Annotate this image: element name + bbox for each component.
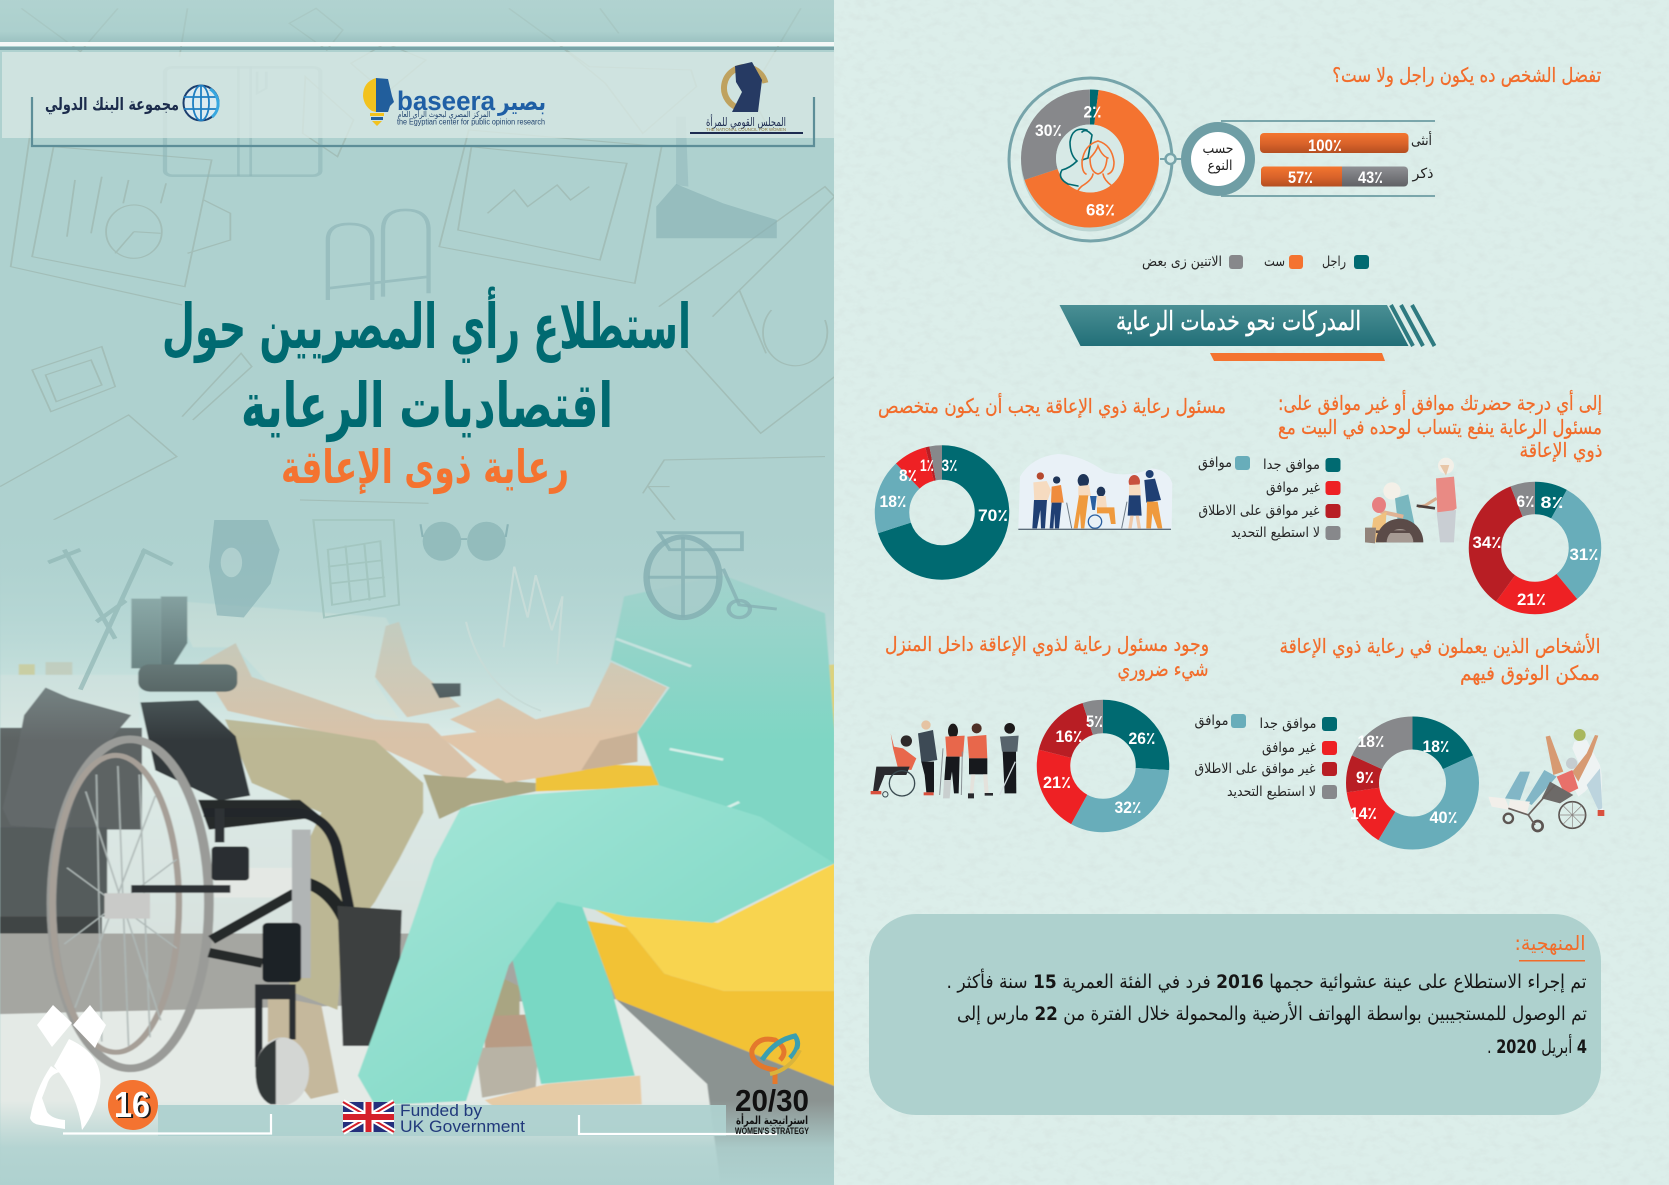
background: sketch line art	[0, 8, 835, 520]
logo: Women's Strategy 2030: استراتيجية المرأة	[736, 1113, 808, 1127]
panel: caregiver must be specialised	[878, 393, 1226, 562]
donut labels: 18٪	[880, 492, 906, 511]
donut labels: 31٪	[1570, 545, 1598, 564]
logo: Women's Strategy 2030	[735, 1036, 809, 1136]
donut shadow	[1021, 94, 1159, 232]
question heading: مسئول رعاية ذوي الإعاقة يجب أن يكون متخصص	[878, 393, 1226, 419]
patient's shirt and arms	[187, 602, 388, 690]
legend: راجل	[1322, 254, 1346, 270]
donut labels: 18٪	[1422, 737, 1450, 756]
photo fades	[0, 575, 834, 728]
question heading: إلى أي درجة حضرتك موافق أو غير موافق على:	[1278, 390, 1602, 416]
panel: home caregiver is necessary	[871, 632, 1209, 817]
question heading: ذوي الإعاقة	[1520, 438, 1602, 463]
donut labels: 8٪	[899, 466, 917, 485]
methodology text	[946, 968, 1587, 1058]
issue number badge: 16	[116, 1085, 152, 1126]
donut labels	[1350, 732, 1458, 827]
legend: لا استطيع التحديد	[1227, 784, 1316, 800]
legend: غير موافق	[1262, 740, 1316, 756]
patient's trousers	[423, 774, 536, 819]
logo: Baseera: the Egyptian center for public opinion research	[397, 118, 545, 126]
question heading: ممكن الوثوق فيهم	[1460, 661, 1600, 685]
funded by UK Government: Funded by	[400, 1101, 483, 1120]
icon: UK flag	[343, 1102, 394, 1132]
funded by UK Government: UK Government	[400, 1117, 525, 1136]
logo: Women's Strategy 2030: 20/30	[735, 1083, 809, 1118]
footer rule: left	[63, 1114, 271, 1134]
outer ring	[1009, 78, 1172, 241]
donut labels: 32٪	[1114, 798, 1142, 817]
donut labels: 21٪	[1043, 773, 1071, 792]
illustration: elderly man in wheelchair	[1365, 458, 1457, 543]
methodology text: تم الوصول للمستجيبين بواسطة الهواتف الأرضية والمحمولة خلال الفترة من 22 مارس إلى	[957, 1002, 1587, 1026]
by gender badge	[1181, 122, 1255, 196]
donut labels	[880, 456, 1008, 525]
question heading: وجود مسئول رعاية لذوي الإعاقة داخل المنزل	[885, 632, 1209, 657]
sofa and pillow	[0, 728, 142, 830]
donut labels: 16٪	[1056, 727, 1082, 746]
top strip	[0, 8, 834, 42]
legend: لا استطيع التحديد	[1231, 525, 1320, 541]
question heading: مسئول الرعاية ينفع يتساب لوحده في البيت مع	[1278, 415, 1602, 440]
question heading: تفضل الشخص ده يكون راجل ولا ست؟	[1332, 63, 1601, 87]
title: استطلاع رأي المصريين حول	[162, 286, 691, 363]
wheelchair	[131, 598, 161, 668]
legend: ست	[1264, 254, 1285, 270]
legend: موافق	[1198, 455, 1232, 471]
donut labels: 2٪	[1084, 102, 1102, 122]
footer band	[158, 1105, 726, 1136]
question heading: الأشخاص الذين يعملون في رعاية ذوي الإعاقة	[1280, 634, 1600, 659]
white rule	[0, 42, 834, 46]
donut chart	[892, 462, 992, 562]
logo: Baseera: بصير	[497, 88, 546, 116]
icons: crutches, hearing aid, calculator, glasses, wheelchair	[48, 520, 777, 711]
legend	[1198, 455, 1340, 541]
legend: موافق	[1194, 713, 1228, 729]
donut labels: 18٪	[1358, 732, 1384, 751]
donut labels: 8٪	[1540, 493, 1564, 512]
bar: female: 100٪	[1308, 136, 1342, 155]
illustration: man cheering in wheelchair	[1488, 729, 1604, 831]
illustration: people with disabilities	[1018, 454, 1172, 530]
donut labels: 26٪	[1128, 729, 1156, 748]
issue number badge: 16	[114, 1084, 150, 1125]
panel: cover page	[0, 0, 845, 1185]
donut centre	[1056, 124, 1124, 192]
question heading: شيء ضروري	[1118, 657, 1208, 682]
logo: Baseera: baseera	[397, 86, 496, 116]
issue number badge	[108, 1080, 158, 1130]
donut labels: 5٪	[1086, 712, 1103, 731]
donut chart	[1485, 498, 1585, 598]
panel: man or woman preference: 30٪	[1035, 121, 1062, 140]
donut chart	[1362, 733, 1462, 833]
section banner: المدركات نحو خدمات الرعاية	[1116, 307, 1361, 337]
background: book, arch and shoe icons	[165, 67, 777, 300]
logo: Women's Strategy 2030: WOMEN'S STRATEGY	[735, 1126, 809, 1136]
title	[162, 286, 691, 494]
by gender badge: النوع	[1208, 158, 1232, 174]
nurse's arm	[439, 662, 667, 783]
logo: Baseera: المركز المصري لبحوث الرأي العام	[398, 109, 490, 119]
bar: female	[1260, 131, 1432, 155]
by gender badge: حسب	[1202, 141, 1234, 157]
bar: male	[1261, 166, 1434, 187]
subtitle: رعاية ذوى الإعاقة	[281, 440, 569, 494]
donut labels: 34٪	[1472, 533, 1502, 552]
legend	[1194, 713, 1337, 800]
panel: caregivers can be trusted	[1194, 634, 1604, 833]
yellow seat	[536, 764, 664, 791]
photo: patient and nurse	[0, 520, 845, 1185]
bar: male: ذكر	[1411, 166, 1434, 182]
donut labels: 3٪	[942, 456, 958, 475]
legend: غير موافق على الاطلاق	[1194, 761, 1316, 777]
question heading	[885, 632, 1209, 682]
logo: World Bank Group	[45, 85, 218, 120]
donut labels: 1٪	[920, 456, 934, 475]
nurse's legs	[509, 893, 635, 1084]
donut labels: 14٪	[1350, 804, 1377, 823]
legend	[1142, 254, 1369, 270]
nurse's scrubs	[611, 575, 835, 864]
donut labels	[1472, 492, 1598, 609]
connector node	[1166, 154, 1176, 164]
bar: male: 43٪	[1358, 168, 1383, 187]
logo: National Council for Women: المجلس القومي للمرأة	[706, 114, 786, 130]
panel: man or woman preference: 68٪	[1086, 200, 1115, 220]
legend: الاتنين زى بعض	[1142, 254, 1222, 270]
question heading	[1278, 390, 1602, 463]
logo: National Council for Women: THE NATIONAL COUNCIL FOR WOMEN	[706, 127, 786, 132]
logo band bracket	[32, 97, 814, 146]
donut labels: 70٪	[978, 506, 1008, 525]
legend: غير موافق على الاطلاق	[1198, 503, 1320, 519]
panel: man or woman preference	[1009, 63, 1601, 270]
logo band	[2, 52, 834, 138]
legend: موافق جدا	[1260, 716, 1316, 732]
donut labels: 9٪	[1356, 768, 1374, 787]
donut labels: 6٪	[1516, 492, 1534, 511]
donut labels: 21٪	[1517, 590, 1546, 609]
question heading	[1280, 634, 1600, 685]
title: اقتصاديات الرعاية	[241, 369, 613, 442]
logo: National Council for Women	[690, 62, 803, 134]
footer rule: right	[579, 1115, 777, 1134]
illustration: diverse group of people	[871, 720, 1019, 798]
methodology text: 4 أبريل 2020 .	[1487, 1034, 1587, 1058]
connector	[1160, 158, 1181, 160]
banner underline	[1210, 353, 1385, 361]
methodology text: تم إجراء الاستطلاع على عينة عشوائية حجمها 2016 فرد في الفئة العمرية 15 سنة فأكثر .	[946, 968, 1586, 994]
donut labels: 40٪	[1430, 808, 1458, 827]
donut chart	[1054, 716, 1152, 816]
panel: caregiver alone at home	[1198, 390, 1602, 609]
logo: World Bank Group: مجموعة البنك الدولي	[45, 95, 179, 115]
bar: female: أنثى	[1411, 131, 1432, 149]
legend: غير موافق	[1266, 480, 1320, 496]
funded by UK Government	[343, 1101, 525, 1136]
panel: methodology	[869, 914, 1601, 1115]
section banner	[1060, 305, 1434, 361]
icon: man and woman outlines	[1060, 129, 1120, 203]
logo: Baseera	[363, 78, 546, 126]
frame lines	[1221, 121, 1435, 196]
methodology heading: المنهجية:	[1514, 931, 1586, 955]
legend: موافق جدا	[1263, 457, 1320, 473]
bar: male: 57٪	[1288, 168, 1313, 187]
donut chart	[1038, 107, 1142, 210]
icon: series logo with face profile	[30, 1005, 106, 1130]
donut labels	[1043, 712, 1156, 817]
page background: right	[834, 0, 1669, 1185]
